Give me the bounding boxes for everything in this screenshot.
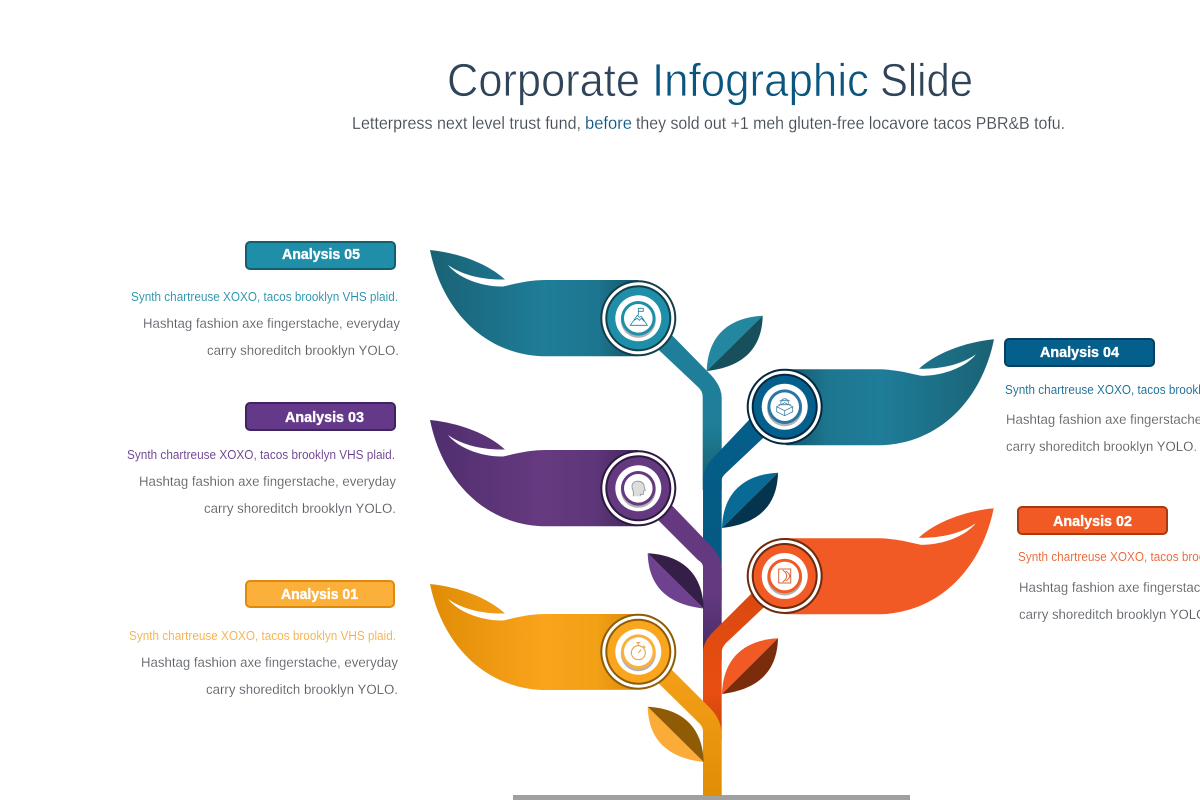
text 03: Synth chartreuse XOXO, tacos brooklyn VHS plaid. — [127, 448, 395, 462]
icon badge 05 — [600, 280, 676, 356]
small leaf: blue — [722, 473, 778, 528]
panel: analysis 01 — [129, 581, 676, 697]
tree stem and branches — [645, 323, 777, 796]
title: Corporate — [447, 54, 640, 106]
icon badge 02 — [747, 538, 823, 614]
subtitle: before — [585, 113, 632, 133]
text 04: carry shoreditch brooklyn YOLO. — [1006, 439, 1197, 454]
label 04: Analysis 04 — [1040, 344, 1120, 361]
text 05: Hashtag fashion axe fingerstache, everyday — [143, 316, 400, 331]
label 01: Analysis 01 — [281, 586, 358, 603]
text 03 — [127, 448, 396, 516]
panel: analysis 03 — [127, 403, 676, 526]
text 05: carry shoreditch brooklyn YOLO. — [207, 343, 399, 358]
ground bar — [513, 795, 910, 800]
panel: analysis 04 — [747, 339, 1200, 454]
label 03 — [246, 403, 395, 430]
panel: analysis 05 — [131, 242, 676, 358]
text 03: Hashtag fashion axe fingerstache, everyday — [139, 474, 396, 489]
banner leaf 05 — [430, 250, 638, 356]
title: Slide — [880, 54, 973, 106]
text 03: carry shoreditch brooklyn YOLO. — [204, 501, 396, 516]
text 02 — [1018, 550, 1200, 622]
subtitle — [352, 113, 1065, 133]
label 05: Analysis 05 — [282, 246, 360, 263]
subtitle: Letterpress next level trust fund, — [352, 113, 581, 133]
text 01: Synth chartreuse XOXO, tacos brooklyn VHS plaid. — [129, 629, 396, 643]
text 04 — [1005, 383, 1200, 454]
label 02: Analysis 02 — [1053, 513, 1132, 530]
banner leaf 03 — [430, 420, 638, 526]
label 04 — [1005, 339, 1154, 366]
title — [447, 54, 973, 106]
small leaf: teal — [707, 316, 763, 371]
panel: analysis 02 — [747, 507, 1200, 622]
banner leaf 02 — [786, 508, 994, 614]
text 01: Hashtag fashion axe fingerstache, everyday — [141, 655, 398, 670]
small leaf: amber — [648, 707, 704, 762]
text 05: Synth chartreuse XOXO, tacos brooklyn VHS plaid. — [131, 290, 398, 304]
label 05 — [246, 242, 395, 269]
subtitle: they sold out +1 meh gluten-free locavore tacos PBR&B tofu. — [636, 113, 1065, 133]
banner leaf 04 — [786, 339, 994, 445]
text 05 — [131, 290, 400, 358]
icon badge 03 — [600, 450, 676, 526]
label 02 — [1018, 507, 1167, 534]
small leaf: red-orange — [722, 638, 778, 694]
small leaf: purple — [648, 553, 704, 609]
label 03: Analysis 03 — [285, 409, 364, 426]
text 01: carry shoreditch brooklyn YOLO. — [206, 682, 398, 697]
icon badge 01 — [600, 614, 676, 690]
banner leaf 01 — [430, 584, 638, 690]
label 01 — [246, 581, 394, 607]
title: Infographic — [652, 54, 869, 106]
text 01 — [129, 629, 398, 697]
icon badge 04 — [747, 369, 823, 445]
